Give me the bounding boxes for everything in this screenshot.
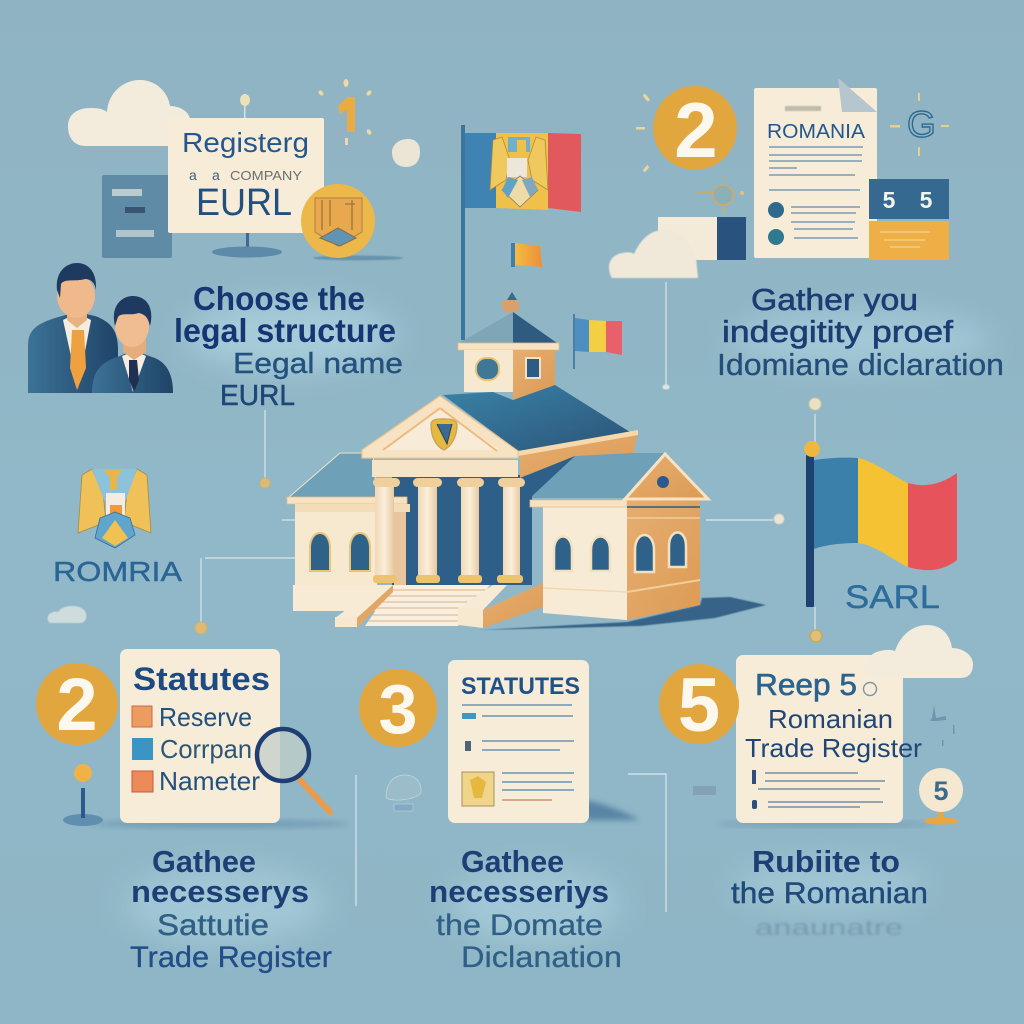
left wing body bbox=[287, 497, 410, 585]
blue and orange date block: 5 bbox=[883, 187, 896, 213]
small flag top bbox=[511, 243, 542, 267]
text: choose the legal structure: legal structure bbox=[174, 312, 396, 349]
right wing roof bbox=[530, 453, 665, 498]
main roof bbox=[443, 385, 630, 452]
text: gather your identity proof bbox=[717, 282, 1004, 382]
text: choose the legal structure: Eegal name bbox=[233, 348, 403, 380]
person right bbox=[92, 296, 173, 393]
columns bbox=[373, 478, 525, 583]
statutes document card bbox=[448, 660, 640, 823]
gold emblem coin bbox=[301, 184, 403, 260]
small cloud icon bbox=[386, 775, 421, 811]
flag: large right bbox=[804, 441, 957, 607]
text: choose the legal structure: Choose the bbox=[193, 280, 365, 317]
number badge three bbox=[359, 669, 437, 748]
panel: step 3 statutes bbox=[359, 660, 640, 823]
text: statutes trade register bbox=[125, 844, 332, 974]
register sign board: COMPANY bbox=[230, 168, 302, 183]
cupola roof bbox=[459, 292, 557, 343]
text: statutes trade register: necesserys bbox=[131, 874, 309, 909]
side panel bbox=[102, 175, 172, 258]
register sign board: a bbox=[212, 167, 220, 183]
trade register card bbox=[736, 655, 903, 823]
panel: step 2 statutes bbox=[36, 649, 350, 828]
statutes card: Corrpan bbox=[160, 734, 252, 764]
text: statutes trade register: Trade Register bbox=[130, 941, 332, 974]
document romania: ROMANIA bbox=[767, 121, 866, 143]
left wing roof bbox=[288, 453, 377, 498]
number one with rays bbox=[318, 79, 372, 145]
statutes card: Nameter bbox=[159, 766, 260, 796]
number badge two bbox=[36, 663, 118, 746]
panel: people illustration bbox=[28, 263, 173, 393]
text: domate diclanation bbox=[429, 844, 622, 974]
pediment bbox=[362, 396, 518, 477]
portico shadow bbox=[392, 475, 532, 585]
small seal bbox=[392, 139, 420, 167]
text: domate diclanation: necesseriys bbox=[429, 874, 609, 909]
text: submit to the romanian: the Romanian bbox=[731, 877, 928, 910]
number badge five bbox=[659, 663, 739, 748]
trade register text: Trade Register bbox=[745, 733, 922, 763]
small glyph with rays bbox=[890, 93, 949, 156]
number badge two: 2 bbox=[674, 86, 718, 174]
text: choose the legal structure: EURL bbox=[220, 380, 295, 412]
document romania bbox=[754, 78, 877, 258]
right wing windows bbox=[554, 532, 686, 572]
small label bbox=[693, 786, 716, 795]
connector lines bbox=[195, 282, 822, 912]
text: domate diclanation: Gathee bbox=[461, 844, 564, 879]
text: domate diclanation: Diclanation bbox=[461, 941, 622, 974]
small cloud left bbox=[48, 606, 86, 623]
text: statutes trade register: Gathee bbox=[152, 844, 256, 879]
number badge two: 2 bbox=[56, 663, 98, 746]
cloud top right of card bbox=[865, 625, 973, 678]
blue and orange date block: 5 bbox=[920, 187, 933, 213]
text: submit to the romanian: Rubiite to bbox=[752, 844, 900, 879]
ground shadow bbox=[480, 597, 766, 630]
register sign board: Registerg bbox=[182, 127, 309, 158]
panel: step 1 register sign bbox=[68, 79, 420, 260]
statutes card bbox=[90, 649, 350, 828]
small five pin bbox=[919, 768, 963, 824]
statutes document card: STATUTES bbox=[461, 673, 580, 700]
statutes card: Statutes bbox=[133, 661, 270, 697]
building: parliament bbox=[287, 292, 766, 630]
lightbulb magnifier bbox=[696, 176, 744, 213]
text: gather your identity proof: Gather you bbox=[751, 282, 918, 317]
blue and orange date block bbox=[869, 179, 949, 260]
cloud top left bbox=[68, 80, 190, 146]
statutes card: Reserve bbox=[159, 702, 252, 732]
register sign board bbox=[168, 118, 324, 233]
text: submit to the romanian bbox=[731, 844, 928, 940]
small flag middle bbox=[573, 314, 622, 369]
eagle on flag bbox=[490, 137, 548, 207]
right wing body bbox=[530, 454, 708, 620]
monitor stand bbox=[212, 233, 282, 258]
desk lamp bbox=[63, 764, 103, 826]
number badge five: 5 bbox=[678, 663, 720, 748]
text: choose the legal structure bbox=[174, 280, 403, 412]
stack and cloud bbox=[609, 217, 746, 278]
label: romria: ROMRIA bbox=[53, 556, 182, 587]
text: gather your identity proof: Idomiane diclaration bbox=[717, 347, 1004, 382]
register sign board: a bbox=[189, 167, 197, 183]
panel: step 2 top right bbox=[609, 78, 949, 278]
number badge three: 3 bbox=[379, 670, 417, 748]
label: sarl: SARL bbox=[845, 579, 940, 615]
cupola body bbox=[458, 343, 559, 400]
pin above sign bbox=[240, 94, 250, 118]
trade register card: Reep 5 bbox=[755, 667, 857, 702]
base left bbox=[293, 585, 393, 611]
small glyph with rays: G bbox=[907, 104, 936, 145]
left wing windows bbox=[310, 533, 370, 571]
number badge two bbox=[636, 86, 737, 174]
small five pin: 5 bbox=[933, 776, 949, 806]
top flag with coat of arms bbox=[461, 125, 581, 340]
coat of arms bbox=[78, 469, 151, 548]
card shadow bbox=[715, 821, 935, 827]
register sign board: EURL bbox=[196, 182, 292, 224]
text: statutes trade register: Sattutie bbox=[157, 909, 269, 942]
tiny marks bbox=[930, 705, 954, 746]
magnifying glass bbox=[257, 729, 330, 812]
text: submit to the romanian: anaunatre bbox=[755, 915, 903, 940]
panel: step 5 trade register bbox=[659, 625, 973, 827]
trade register card: Romanian bbox=[768, 704, 893, 734]
stairs bbox=[335, 583, 543, 628]
person left bbox=[28, 263, 118, 393]
text: gather your identity proof: indegitity proef bbox=[722, 314, 953, 349]
text: domate diclanation: the Domate bbox=[436, 909, 603, 942]
